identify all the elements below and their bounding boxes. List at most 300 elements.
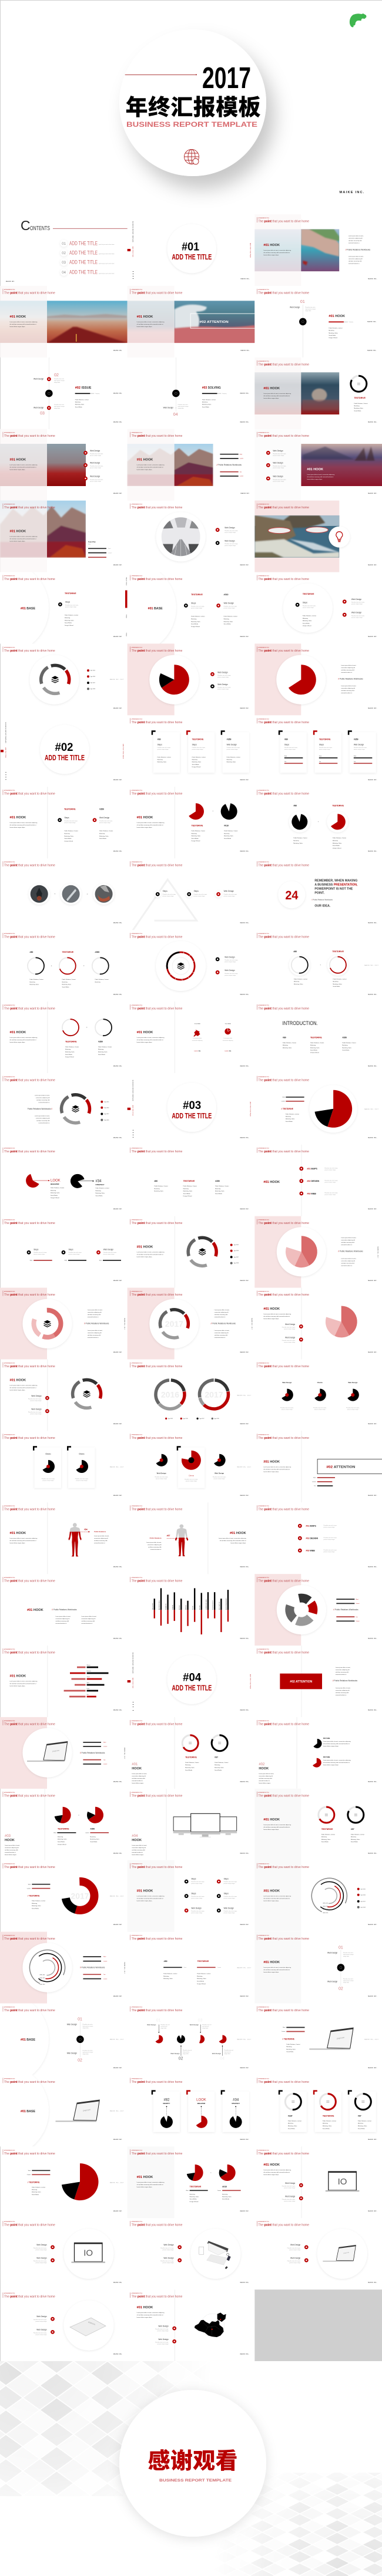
header: A PRESENTATION TITLE [4, 646, 15, 648]
header: A PRESENTATION TITLE [132, 1505, 142, 1507]
slide: circle laptop [257, 2221, 377, 2284]
side text: consectetur adipiscing elit [88, 1332, 102, 1334]
lists: Public Relations, Contact [95, 979, 109, 980]
header: A PRESENTATION TITLE [4, 504, 15, 505]
header [257, 933, 309, 939]
slide: shaded ring [0, 1288, 126, 1360]
section number: #02 [55, 741, 73, 754]
footer: MAIKE INC. [368, 851, 377, 852]
header [3, 933, 55, 939]
hook text: elit sed diam nonummy nibh euismod tincidunt ut [137, 1898, 163, 1900]
timeline: integer dolor. [343, 1982, 350, 1984]
footer [240, 392, 249, 423]
butterfly chart: Women [87, 1665, 91, 1666]
header: A PRESENTATION TITLE [258, 1004, 269, 1006]
feature list: Web Design [224, 890, 234, 892]
hook text: #01 HOOK [137, 2306, 153, 2309]
header [130, 1935, 182, 1941]
feature list: Web Design [158, 2325, 169, 2328]
timeline: 03 [40, 412, 45, 416]
feature list: posuere semper integer [224, 532, 236, 534]
slide: hook icons [130, 1002, 249, 1073]
columns: Public Relations, Contact [351, 1834, 364, 1835]
header: A PRESENTATION TITLE [132, 1148, 142, 1149]
header: A PRESENTATION TITLE [4, 2292, 15, 2294]
statement line 4: POINT. [314, 891, 325, 895]
callouts: Phasellus vitae nisl [160, 2024, 170, 2025]
callouts: turpis posuere [183, 2051, 189, 2053]
bar chart [152, 1588, 228, 1634]
header: A PRESENTATION TITLE [132, 646, 142, 648]
header: A PRESENTATION TITLE [258, 1076, 269, 1078]
side text: // Public Relations Workbooks [211, 1322, 236, 1324]
big donut [62, 1878, 98, 1914]
feature list: Web Design [36, 2315, 47, 2318]
footer: MAIKE INC. [368, 1995, 377, 1997]
columns: Public Relations, Contact [283, 1043, 296, 1044]
header [3, 1792, 55, 1798]
footer: MAIKE INC. [113, 392, 122, 394]
header [3, 1577, 55, 1583]
thick donut chart [285, 1593, 318, 1626]
hook text: elit sed diam nonummy nibh euismod tincidunt ut [9, 1683, 36, 1685]
testdrive: Marketing [354, 405, 360, 407]
red box: #02 ATTENTION [290, 1680, 313, 1684]
footer: MAIKE INC. [240, 2210, 249, 2212]
slide: hook timeline [254, 1932, 377, 2004]
feature list: posuere semper integer [90, 467, 101, 469]
header: A PRESENTATION TITLE [258, 2221, 269, 2223]
slide: pie red black [128, 643, 249, 715]
header: The point that you want to drive home [258, 1937, 309, 1941]
header [257, 1434, 309, 1440]
step grid: posuere semper integer [224, 1897, 235, 1899]
feature list: Web Design [290, 2257, 301, 2260]
feature list: Web Design [36, 2244, 47, 2246]
columns: #350 [98, 1040, 103, 1043]
pie column: consectetur adipiscing [223, 1040, 233, 1041]
lists: Marketing, Sales [293, 842, 303, 844]
hook text: Lorem ipsum dolor sit amet, consectetur adipiscing [263, 1896, 291, 1897]
columns: Design & Brand [192, 840, 200, 842]
footer: MAIKE INC. [113, 1995, 122, 1997]
hook text: elit sed diam nonummy nibh euismod tincidunt ut [9, 1540, 36, 1542]
hook text [9, 315, 38, 328]
white background [0, 2361, 382, 2576]
columns [186, 2186, 241, 2203]
header: The point that you want to drive home [258, 291, 309, 295]
header: The point that you want to drive home [4, 1437, 55, 1440]
slide: bars laptop [257, 2007, 378, 2069]
bars [282, 1097, 304, 1102]
step grid: Steps [224, 1893, 229, 1895]
header: The point that you want to drive home [4, 1937, 55, 1941]
hook text [9, 458, 38, 471]
callouts: integer dolor. [183, 2053, 189, 2055]
timeline: Web Design [327, 1981, 338, 1983]
hook column [132, 1835, 147, 1856]
hook text: elit sed diam nonummy nibh euismod tincidunt ut [263, 1468, 290, 1470]
bars: Content [27, 2174, 31, 2176]
footer: MAIKE INC. [240, 707, 249, 709]
columns: #80 [154, 1180, 158, 1182]
bars: // Public Relations Workbooks [217, 464, 242, 466]
gray band [254, 1789, 301, 1860]
column one: Social Media [65, 838, 72, 839]
slide: donut legend [3, 646, 124, 709]
feature list: posuere semper integer [217, 676, 229, 678]
pie item 1: elit sed diam nonummy nibh euismod tincidunt ut [323, 1743, 350, 1745]
slide: photo pool [254, 429, 382, 501]
header: A PRESENTATION TITLE [4, 1290, 15, 1293]
testdrive: Phasellus vitae nisl in turpis, [65, 605, 79, 606]
photo circle 1 [29, 884, 50, 905]
feature list: Phasellus vitae nisl in turpis, [282, 1327, 295, 1328]
circle [156, 941, 206, 991]
timeline: Phasellus vitae nisl in [305, 307, 316, 308]
feature list: Web Design [224, 540, 235, 542]
legend: Type 2018 [104, 1120, 109, 1121]
columns: Social Media [215, 1193, 223, 1195]
titles: TESTDRIVE [332, 805, 344, 807]
hook text [263, 1890, 291, 1902]
bar chart: TRAVEL [172, 1604, 173, 1610]
step grid: Phasellus vitae nisl in turpis, [224, 1911, 237, 1912]
columns: Public Relations, Contact [65, 1047, 79, 1048]
card 1: Marketing [288, 2123, 294, 2125]
footer: MAIKE INC. [240, 392, 249, 394]
bar chart: RETAIL [179, 1604, 180, 1610]
big donut: 2017 [71, 1891, 89, 1900]
step 2: Steps [68, 1249, 73, 1251]
hook text: elit sed diam nonummy nibh euismod tincidunt ut [263, 1969, 290, 1971]
hook text: #01 HOOK [263, 1961, 280, 1964]
contents items: 03 [62, 261, 66, 265]
feature list: posuere semper integer [324, 1551, 335, 1553]
pie column: Lorem ipsum dolor [223, 1038, 232, 1039]
footer: MAIKE INC. [113, 707, 122, 709]
header: The point that you want to drive home [4, 2009, 55, 2012]
band [254, 358, 301, 429]
header: A PRESENTATION TITLE [132, 1004, 142, 1006]
columns [65, 1040, 112, 1058]
slide: concentric pink [0, 1932, 126, 2004]
hook text: #01 HOOK [137, 1031, 153, 1034]
side marks [128, 1080, 134, 1138]
feature list: Phasellus vitae nisl in turpis, [33, 2261, 47, 2262]
photo [254, 229, 339, 271]
header: The point that you want to drive home [258, 721, 309, 724]
slide: base single [0, 572, 128, 643]
columns: Marketing, Sales [154, 1191, 163, 1192]
header: The point that you want to drive home [258, 1150, 309, 1154]
slide: hook two columns [3, 787, 122, 858]
header: A PRESENTATION TITLE [258, 718, 269, 720]
feature list: posuere semper integer [36, 2262, 47, 2264]
card 1: IDENTITY [163, 2102, 170, 2105]
feature list [299, 1166, 338, 1196]
footer [237, 1967, 252, 1997]
slide: photo wave [128, 286, 255, 358]
pie right [213, 1454, 226, 1479]
side text: euismod tincidunt ut. [336, 1674, 347, 1675]
slide: maps design web [257, 1145, 377, 1216]
testdrive: TESTDRIVE [65, 592, 76, 595]
hook text: laoreet dolore magna aliqua. [9, 469, 25, 471]
hook text: elit sed diam nonummy nibh euismod tincidunt ut [9, 824, 36, 826]
hook text: laoreet dolore magna aliqua. [263, 1318, 279, 1320]
feature list: posuere semper integer [284, 1341, 296, 1343]
footer [110, 2181, 124, 2212]
side marks: BUSINESS REPORT TEMPLATE [132, 1653, 134, 1674]
timeline: Phasellus vitae nisl in [82, 2050, 93, 2051]
lists [29, 979, 109, 988]
feature list [155, 2325, 176, 2345]
header: A PRESENTATION TITLE [132, 2149, 142, 2151]
tablet: popcorn [88, 2321, 96, 2326]
hook column: sed diam nonummy nibh [132, 1850, 146, 1851]
titles [293, 950, 344, 953]
feature list: Web Design [217, 671, 228, 673]
pie column: TITLE HERE [224, 1023, 232, 1024]
card 3: Phasellus vitae nisl in turpis, [354, 747, 367, 748]
header [257, 360, 309, 366]
hook column: laoreet dolore magna. [5, 1854, 17, 1856]
feature list: posuere semper integer [273, 467, 284, 469]
hook column: HOOK [132, 1839, 142, 1842]
pie left: posuere semper integer [156, 1478, 167, 1479]
header: A PRESENTATION TITLE [258, 2078, 269, 2079]
header: The point that you want to drive home [4, 2152, 55, 2156]
timeline: turpis posuere semper [305, 308, 316, 310]
equals: = [87, 893, 88, 895]
header [257, 1362, 309, 1368]
lists: Marketing, Sales [333, 842, 341, 844]
columns: Marketing, Sales [351, 1839, 360, 1840]
side text: consectetur adipiscing elit [215, 1311, 229, 1313]
header [3, 1720, 55, 1726]
hook text: elit sed diam nonummy nibh euismod tincidunt ut [263, 1316, 290, 1317]
testdrive [281, 1108, 299, 1122]
hook column: euismod tincidunt ut [132, 1852, 143, 1853]
callout [146, 1535, 186, 1550]
legend: Type 2015 [168, 1418, 173, 1420]
lists: Social Media [62, 987, 69, 988]
header: The point that you want to drive home [4, 2081, 55, 2084]
legend: Type 2018 [91, 689, 95, 690]
timeline: Web Design [67, 2023, 77, 2025]
columns: #350 [215, 1180, 220, 1182]
header: The point that you want to drive home [4, 864, 55, 868]
header: A PRESENTATION TITLE [132, 2078, 142, 2079]
columns: Marketing [98, 1048, 104, 1050]
feature list: Phasellus vitae nisl in turpis, [224, 544, 238, 545]
header: The point that you want to drive home [132, 1437, 182, 1440]
side text: euismod tincidunt ut. [88, 1316, 99, 1318]
strategy block: Marketing, Sales [95, 1192, 105, 1194]
pie right: posuere semper integer [214, 1478, 225, 1479]
card 1: Public Relations, Contact [158, 757, 171, 758]
header: The point that you want to drive home [4, 434, 55, 438]
big pie [62, 2163, 99, 2200]
header: The point that you want to drive home [4, 1866, 55, 1869]
footer: MAIKE INC. [240, 421, 249, 423]
footer: MAIKE INC. [113, 1137, 122, 1138]
hook text: laoreet dolore magna aliqua. [137, 326, 152, 328]
side text: consectetur adipiscing elit [341, 687, 356, 689]
feature list: Web Design [285, 1323, 296, 1326]
hook text: #01 HOOK [9, 530, 26, 534]
text blocks: euismod tincidunt ut. [55, 1623, 67, 1624]
issue text: Public Relations, Contact [75, 399, 89, 400]
columns: Content [85, 1832, 89, 1834]
header: A PRESENTATION TITLE [258, 1148, 269, 1149]
hook text [263, 1818, 291, 1830]
hook text: #01 HOOK [263, 1460, 280, 1464]
column one: TESTDRIVE [64, 808, 76, 811]
lists: Marketing [333, 839, 339, 841]
feature list: Phasellus vitae nisl in turpis, [194, 894, 207, 895]
columns: Public Relations, Contact [215, 1762, 228, 1764]
lists [293, 837, 346, 849]
hook text: #01 HOOK [263, 1890, 280, 1893]
solving text: Marketing, Sales [202, 404, 211, 406]
feature list: posuere semper integer [158, 2330, 169, 2332]
card 2 [67, 1446, 95, 1488]
columns: Social Media [65, 1054, 73, 1056]
footer: MAIKE INC. [368, 1924, 377, 1926]
footer: MAIKE INC. [367, 321, 377, 322]
card 2: BEHAVIOR [197, 2102, 205, 2105]
pie column: 1,000 $ / 29% [224, 1051, 232, 1052]
rings: = [86, 1026, 88, 1029]
left text: sed diam nonummy nibh [36, 1100, 50, 1101]
feature list: Phasellus vitae nisl in turpis, [324, 1193, 338, 1194]
legend: Type 2017 [360, 1901, 366, 1902]
testdrive [354, 397, 368, 412]
figure [68, 1523, 82, 1556]
timeline: Web Design [163, 406, 173, 409]
slide: timeline 01 [257, 289, 377, 358]
header: A PRESENTATION TITLE [4, 1648, 15, 1650]
statement: REMEMBER, WHEN MAKING [314, 879, 357, 883]
card 1: posuere semper integer [43, 1479, 54, 1481]
ring red [327, 955, 349, 976]
timeline: Web Design [33, 377, 44, 380]
header [3, 2221, 55, 2227]
footer: MAIKE INC. [240, 1638, 249, 1640]
hook text [9, 1674, 38, 1687]
bars: Content [282, 2031, 286, 2032]
bar chart: FOOD [193, 1606, 194, 1610]
footer: MAIKE INC. [240, 636, 249, 638]
header: The point that you want to drive home [258, 1722, 309, 1726]
header [257, 790, 309, 796]
hook text: elit sed diam nonummy nibh euismod tincidunt ut [9, 323, 36, 325]
footer: MAIKE INC. [113, 2210, 122, 2212]
header: A PRESENTATION TITLE [132, 933, 142, 935]
testdrive: TESTDRIVE [354, 397, 366, 399]
header: The point that you want to drive home [4, 1722, 55, 1726]
card 3: #97 [358, 2115, 361, 2117]
header: The point that you want to drive home [132, 578, 182, 581]
testdrive: Marketing [286, 2046, 292, 2048]
header: The point that you want to drive home [132, 2152, 182, 2156]
slide: shaded pie [254, 1216, 378, 1288]
testdrive: Marketing [286, 1116, 291, 1118]
introduction heading: INTRODUCTION. [283, 1020, 318, 1026]
feature list: Web Design [224, 969, 235, 972]
legend: Type 2017 [104, 1114, 109, 1115]
header [3, 1935, 55, 1941]
plus: + [54, 893, 55, 895]
header: The point that you want to drive home [258, 1007, 309, 1010]
bars [88, 541, 112, 557]
feature list: Phasellus vitae nisl in turpis, [351, 615, 365, 616]
testdrive: Social Media [32, 1908, 39, 1909]
step 1: posuere semper integer [33, 1253, 45, 1255]
columns: Social Media [90, 1842, 98, 1843]
bars [312, 1477, 335, 1486]
header: The point that you want to drive home [132, 434, 182, 438]
section circle [167, 1083, 216, 1132]
card 1: #80 [284, 738, 288, 740]
pie left: Phasellus vitae nisl in turpis, [155, 1476, 168, 1478]
bars: Content [103, 1746, 108, 1748]
hook text: Lorem ipsum dolor sit amet, consectetur adipiscing [9, 1538, 37, 1539]
header: The point that you want to drive home [258, 2081, 309, 2084]
circle [149, 1299, 199, 1348]
side marks [125, 578, 128, 637]
bars: Content [282, 1101, 285, 1102]
side text: consectetur adipiscing elit [341, 1260, 356, 1262]
card 3: posuere semper integer [354, 748, 365, 750]
footer [110, 1466, 124, 1496]
timeline: integer dolor. [82, 2054, 89, 2055]
footer: MAIKE INC. [113, 1924, 122, 1926]
lists: Public Relations, Contact [293, 838, 307, 839]
header: A PRESENTATION TITLE [132, 2292, 142, 2294]
concentric chart: SPEC 82% [323, 1909, 329, 1910]
card 1: Phasellus vitae nisl in turpis, [42, 1478, 55, 1479]
footer: MAIKE INC. [368, 2067, 377, 2069]
text blocks: consectetur adipiscing elit [81, 1618, 96, 1620]
hook text: #01 HOOK [9, 315, 26, 319]
feature list [282, 1323, 303, 1343]
footer: MAIKE INC. [240, 1710, 249, 1711]
pie chart [289, 665, 316, 694]
footer: MAIKE INC. [113, 2139, 122, 2140]
header: A PRESENTATION TITLE [4, 1148, 15, 1149]
columns: Marketing [215, 1764, 220, 1766]
footer: MAIKE INC. [113, 2067, 122, 2069]
footer: MAIKE INC. [368, 1852, 377, 1854]
hook text: laoreet dolore magna aliqua. [263, 1971, 279, 1973]
feature list: Web Design [285, 2195, 296, 2197]
pink panel [254, 501, 339, 572]
column one [58, 808, 78, 842]
band edge [47, 1359, 48, 1431]
note: // Public Relations Workbooks [311, 899, 333, 901]
pie red [327, 811, 348, 832]
bar chart: MEDIA [185, 1605, 187, 1610]
side text: consectetur adipiscing elit [336, 1669, 350, 1671]
issue text [75, 386, 99, 408]
feature list: posuere semper integer [224, 961, 236, 963]
header [130, 1577, 182, 1583]
pie left: Web Design [157, 1472, 166, 1474]
columns: Marketing [65, 1048, 71, 1050]
